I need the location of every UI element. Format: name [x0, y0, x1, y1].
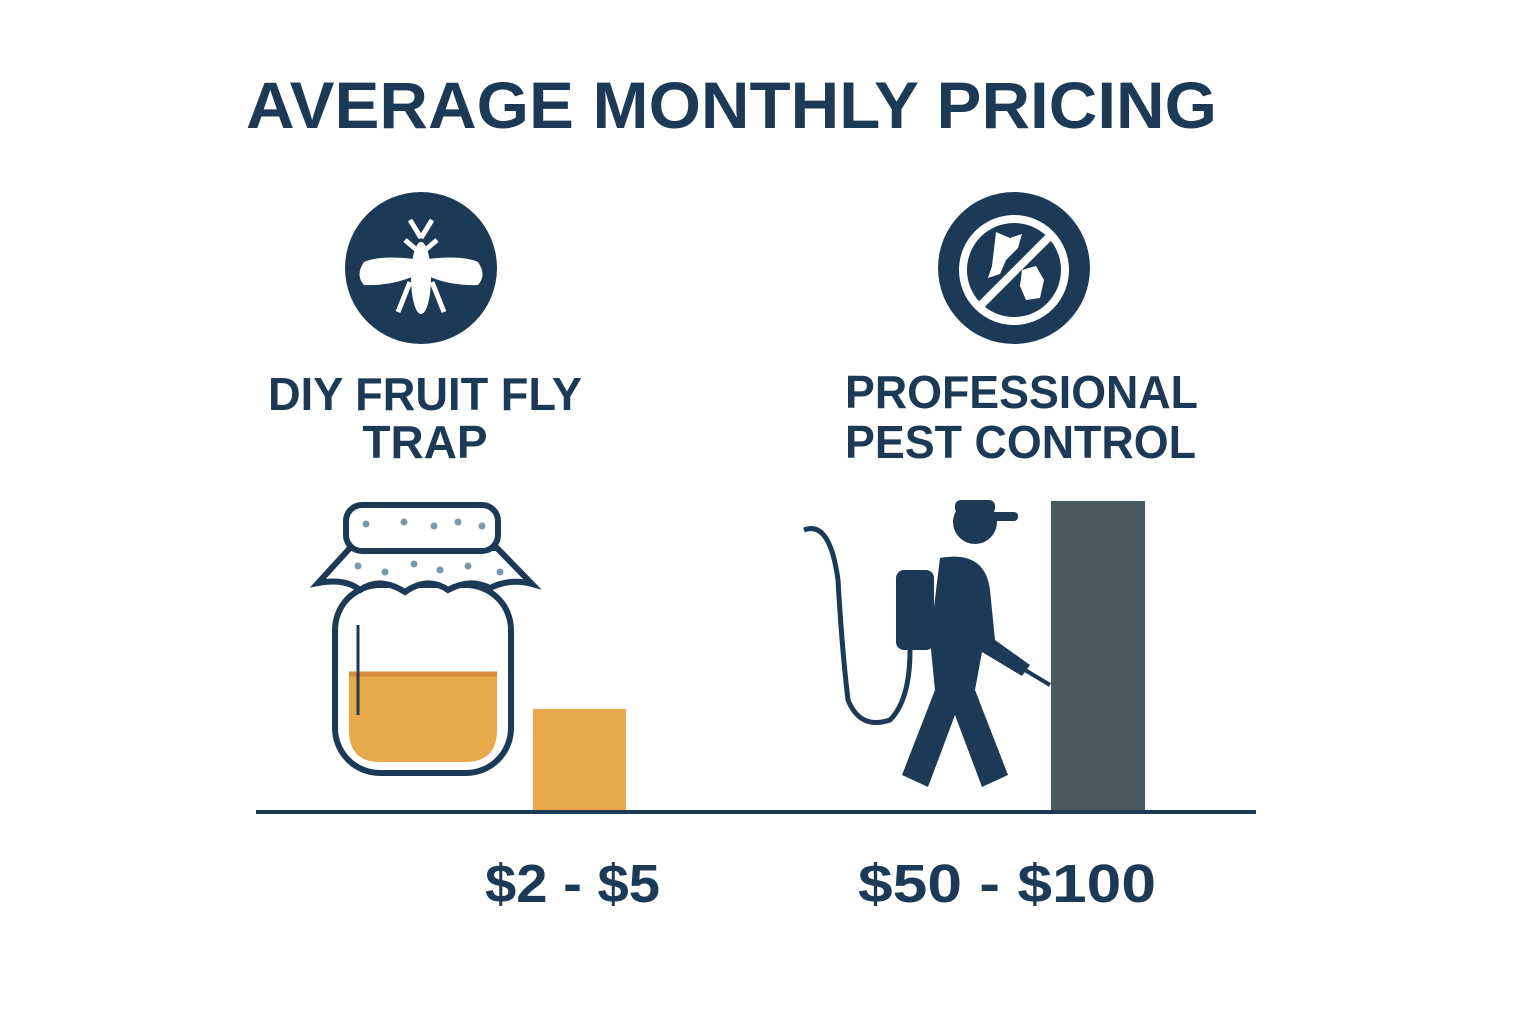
label: DIY: DIY FRUIT FLY: [268, 368, 582, 420]
label: professional: PROFESSIONAL: [845, 366, 1198, 418]
icon: fruit fly: [345, 192, 497, 344]
price: professional: $50 - $100: [858, 854, 1156, 914]
axis line: [256, 810, 1256, 814]
label: DIY: [268, 368, 582, 468]
title: AVERAGE MONTHLY PRICING: [246, 68, 1217, 142]
icon: no pests: [938, 192, 1090, 344]
label: professional: [845, 366, 1198, 468]
label: professional: PEST CONTROL: [845, 416, 1196, 468]
icon: jar trap: [318, 505, 532, 773]
bar: professional: [1051, 501, 1145, 810]
icon: exterminator: [804, 500, 1050, 787]
price: DIY: $2 - $5: [485, 854, 660, 914]
label: DIY: TRAP: [362, 416, 488, 468]
bar: DIY: [533, 709, 626, 810]
